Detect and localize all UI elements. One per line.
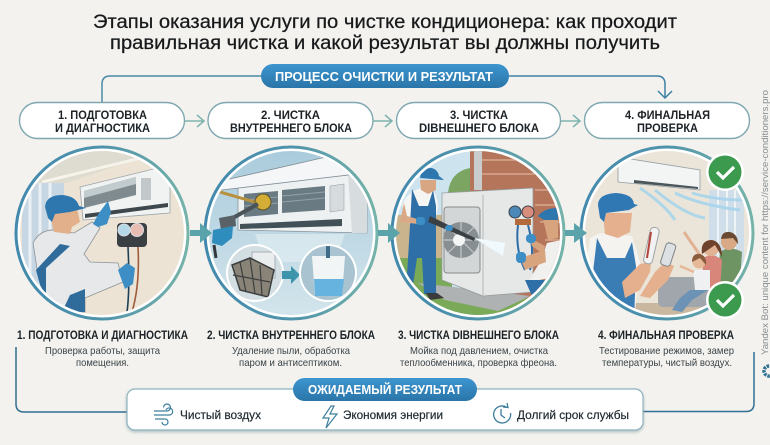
- arrow 3 to 4: [561, 115, 580, 127]
- spray: [474, 238, 505, 256]
- process pill: [261, 64, 509, 88]
- step box 3: DІВНЕШНЕГО БЛОКА: [419, 122, 540, 135]
- open indoor unit: [212, 155, 367, 233]
- item: energy saving: Экономия энергии: [343, 408, 443, 422]
- expected result pill: ОЖИДАЕМЫЙ РЕЗУЛЬТАТ: [308, 382, 462, 397]
- watermark: Yandex Bot: unique content for https://service-conditioners.pro: [760, 90, 770, 355]
- arrow 1 to 2: [185, 115, 204, 127]
- step description 3: [398, 329, 560, 369]
- step description 1: Проверка работы, защита: [45, 345, 160, 357]
- cleaning tools: [212, 190, 271, 258]
- step box 2: ВНУТРЕННЕГО БЛОКА: [230, 122, 353, 135]
- inset: dirty filter: [225, 244, 285, 304]
- step box 4: [584, 102, 750, 138]
- step description 4: Тестирование режимов, замер: [599, 346, 734, 357]
- step description 4: 4. ФИНАЛЬНАЯ ПРОВЕРКА: [598, 329, 735, 342]
- gauges: [117, 223, 147, 312]
- step box 2: 2. ЧИСТКА: [261, 109, 321, 122]
- title: Этапы оказания услуги по чистке кондиционера: как проходит: [93, 11, 677, 33]
- title: [93, 11, 677, 54]
- left worker: [400, 168, 475, 300]
- process pill: ПРОЦЕСС ОЧИСТКИ И РЕЗУЛЬТАТ: [275, 69, 493, 84]
- connector: steps 1 and 4 to result panel: [16, 347, 754, 412]
- circle illustration 4: final check: [580, 146, 755, 323]
- step description 1: помещения.: [76, 358, 129, 369]
- step box 1: И ДИАГНОСТИКА: [55, 122, 151, 135]
- step box 1: 1. ПОДГОТОВКА: [58, 109, 148, 122]
- inset arrow: [282, 266, 300, 284]
- step box 4: ПРОВЕРКА: [637, 122, 699, 135]
- technician: [33, 195, 135, 312]
- step description 1: 1. ПОДГОТОВКА И ДИАГНОСТИКА: [17, 329, 189, 342]
- item: long service life: Долгий срок службы: [517, 408, 629, 422]
- title: правильная чистка и какой результат вы должны получить: [110, 32, 660, 54]
- circle illustration 2: indoor unit cleaning: [205, 146, 380, 321]
- inset: water bag: [298, 244, 358, 304]
- gauges: [509, 206, 534, 270]
- step description 2: [207, 329, 376, 369]
- airflow: [640, 188, 745, 220]
- connector: process pill to steps 1 and 4: [102, 76, 672, 102]
- step description 3: Мойка под давлением, очистка: [410, 346, 548, 357]
- icon: wind: [154, 404, 173, 425]
- circle illustration 3: outdoor unit cleaning: [392, 146, 567, 325]
- flow arrows between circles: [190, 223, 587, 243]
- step boxes row: [20, 102, 750, 138]
- check badge top: [706, 153, 744, 191]
- expected result pill: [293, 378, 477, 401]
- family and sofa: [658, 232, 742, 312]
- ac unit: [618, 157, 700, 190]
- step box 1: [20, 102, 184, 138]
- step description 3: 3. ЧИСТКА DІВНЕШНЕГО БЛОКА: [398, 329, 560, 342]
- result panel: [127, 389, 643, 430]
- icon: lightning bolt: [323, 406, 337, 428]
- step description 4: [598, 329, 735, 369]
- check badge bottom: [706, 281, 744, 319]
- right worker: [516, 208, 562, 296]
- step description 2: паром и антисептиком.: [239, 358, 342, 369]
- step box 4: 4. ФИНАЛЬНАЯ: [625, 109, 710, 122]
- item: clean air: Чистый воздух: [180, 408, 262, 422]
- outdoor unit: [442, 188, 533, 296]
- circle illustration 1: diagnostics: [15, 146, 190, 321]
- step description 4: температуры, чистый воздух.: [602, 358, 732, 369]
- ac unit: [80, 165, 170, 220]
- step description 2: Удаление пыли, обработка: [232, 345, 350, 357]
- icon: clock: [494, 403, 511, 423]
- arrow 2 to 3: [373, 115, 392, 127]
- icon: gear: [764, 366, 770, 376]
- step box 3: 3. ЧИСТКА: [450, 109, 509, 122]
- step description 2: 2. ЧИСТКА ВНУТРЕННЕГО БЛОКА: [207, 329, 376, 342]
- step box 3: [396, 102, 560, 138]
- step description 1: [17, 329, 189, 369]
- step box 2: [208, 102, 373, 138]
- technician with thermometer: [588, 193, 676, 308]
- step description 3: теплообменника, проверка фреона.: [400, 357, 557, 369]
